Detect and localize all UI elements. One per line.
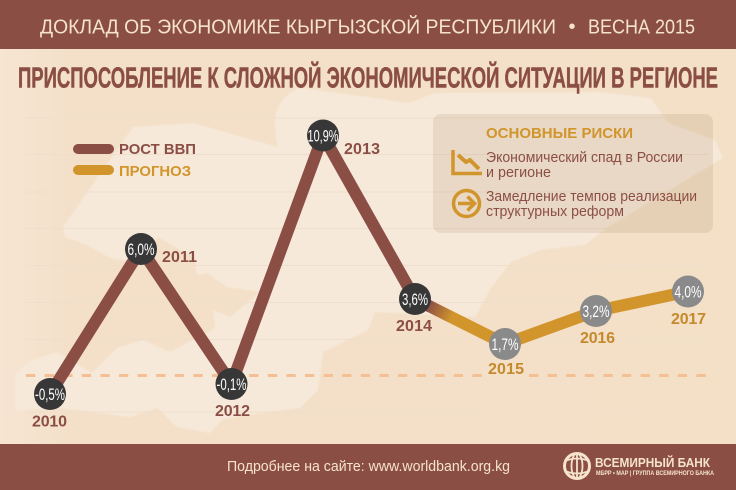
year labels: 2012	[215, 403, 250, 420]
line: forecast	[428, 292, 688, 344]
data point 2011: 6,0%	[128, 240, 154, 259]
icon: arrow in circle	[454, 190, 480, 216]
data point 2016	[580, 295, 612, 327]
risk text: reforms: Замедление темпов реализации	[486, 188, 697, 205]
line: GDP growth	[50, 136, 430, 394]
icon: falling chart	[453, 150, 482, 174]
year labels	[32, 141, 706, 430]
World Bank wordmark: МБРР • МАР | ГРУППА ВСЕМИРНОГО БАНКА	[596, 470, 714, 477]
legend: РОСТ ВВП	[119, 141, 196, 158]
data point 2010	[34, 378, 66, 410]
icon: World Bank globe	[564, 453, 590, 479]
World Bank wordmark	[595, 455, 714, 477]
year labels: 2015	[488, 361, 524, 378]
footer link text: Подробнее на сайте: www.worldbank.org.kg	[227, 458, 510, 475]
year labels: 2013	[344, 141, 380, 158]
header band: ВЕСНА 2015	[588, 16, 695, 38]
risks heading: ОСНОВНЫЕ РИСКИ	[486, 125, 633, 142]
header band: •	[568, 16, 576, 38]
World Bank wordmark: ВСЕМИРНЫЙ БАНК	[595, 455, 710, 470]
panel: main risks	[433, 114, 713, 233]
zero baseline dashed	[26, 374, 708, 377]
year labels: 2017	[671, 311, 706, 328]
risk text: recession: Экономический спад в России	[486, 149, 683, 166]
data point 2013	[307, 120, 339, 152]
data point 2016: 3,2%	[582, 302, 610, 321]
data point 2017	[672, 276, 704, 308]
data point 2015	[489, 328, 521, 360]
data point 2014	[399, 283, 431, 315]
legend	[73, 141, 196, 180]
footer band	[0, 444, 736, 490]
data point 2013: 10,9%	[308, 126, 338, 146]
risk text: reforms: структурных реформ	[486, 203, 624, 220]
data point 2017: 4,0%	[674, 282, 702, 302]
risk text: recession: и регионе	[486, 164, 551, 181]
data point 2014: 3,6%	[402, 290, 428, 309]
year labels: 2011	[162, 249, 197, 266]
background map of Kyrgyzstan	[15, 88, 723, 433]
data point 2015: 1,7%	[492, 335, 518, 354]
grid lines	[26, 118, 708, 412]
year labels: 2016	[580, 330, 615, 347]
data point 2010: -0,5%	[35, 385, 65, 404]
header band: ДОКЛАД ОБ ЭКОНОМИКЕ КЫРГЫЗСКОЙ РЕСПУБЛИКИ	[40, 14, 556, 38]
year labels: 2010	[32, 414, 67, 430]
data point 2012	[216, 368, 248, 400]
header band	[0, 0, 736, 49]
data point 2011	[125, 233, 157, 265]
year labels: 2014	[396, 318, 432, 335]
legend: ПРОГНОЗ	[119, 163, 191, 180]
data point 2012: -0,1%	[216, 375, 246, 394]
